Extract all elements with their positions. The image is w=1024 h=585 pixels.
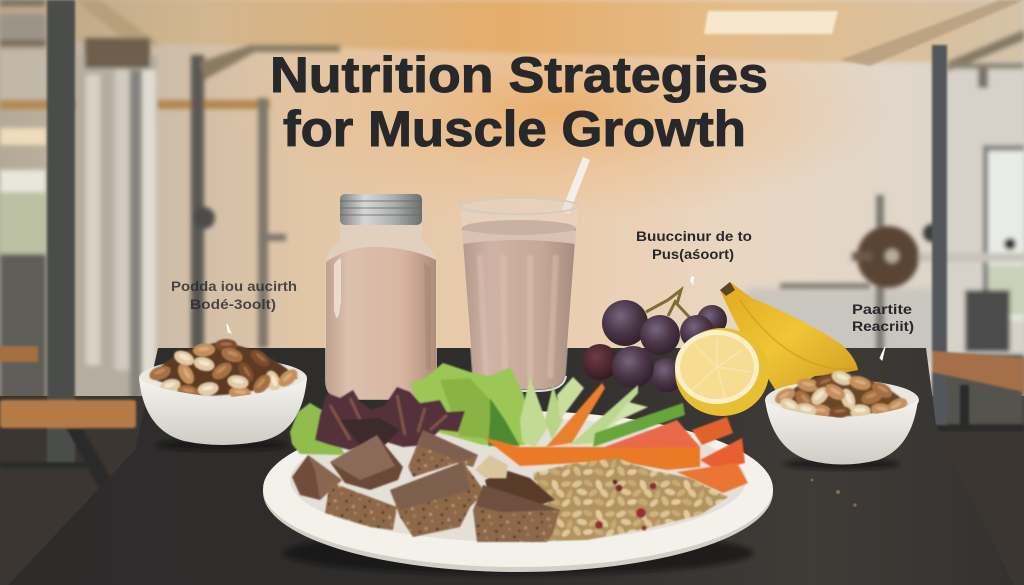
table <box>8 348 1014 585</box>
hazelnut <box>475 455 508 478</box>
carrot sticks <box>483 417 748 493</box>
grain salad <box>533 458 728 541</box>
title <box>270 47 768 157</box>
gym background <box>0 0 1024 404</box>
nuts <box>772 368 910 419</box>
grapes <box>582 290 727 392</box>
label: left nuts <box>171 279 297 333</box>
label: right nuts: Reacriit) <box>852 319 914 334</box>
title: for Muscle Growth <box>283 101 746 157</box>
plate <box>263 411 773 575</box>
cucumber and celery <box>520 377 685 447</box>
lower wall right <box>745 288 935 363</box>
floor <box>0 396 1024 585</box>
nuts <box>147 339 301 400</box>
right bench and pillar <box>930 45 1024 431</box>
protein jar <box>325 194 437 400</box>
banana <box>720 282 858 391</box>
salad greens <box>290 363 530 455</box>
left nut bowl <box>139 339 307 451</box>
left gym rack <box>0 0 340 404</box>
left bench and pillar <box>0 0 136 490</box>
ceiling <box>0 0 1024 66</box>
label: centre right fruit: Pus(aśoort) <box>652 247 734 262</box>
label: left nuts: Bodé-3oolt) <box>190 297 276 312</box>
lemon <box>675 328 769 416</box>
ceiling light <box>704 11 838 34</box>
label: left nuts: Podda iou aucirth <box>171 279 297 294</box>
label: centre right fruit: Buuccinur de to <box>636 229 752 244</box>
label: right nuts: Paartite <box>852 302 913 317</box>
label: centre right fruit <box>636 229 752 285</box>
title: Nutrition Strategies <box>270 47 768 103</box>
straw <box>561 157 590 214</box>
right nut bowl <box>765 368 919 470</box>
crumbs on table <box>811 479 857 507</box>
jar lid <box>340 194 422 225</box>
shake glass <box>460 157 590 391</box>
beef cubes <box>292 430 560 542</box>
label: right nuts <box>852 302 914 360</box>
right gym rack and window <box>780 30 1024 365</box>
